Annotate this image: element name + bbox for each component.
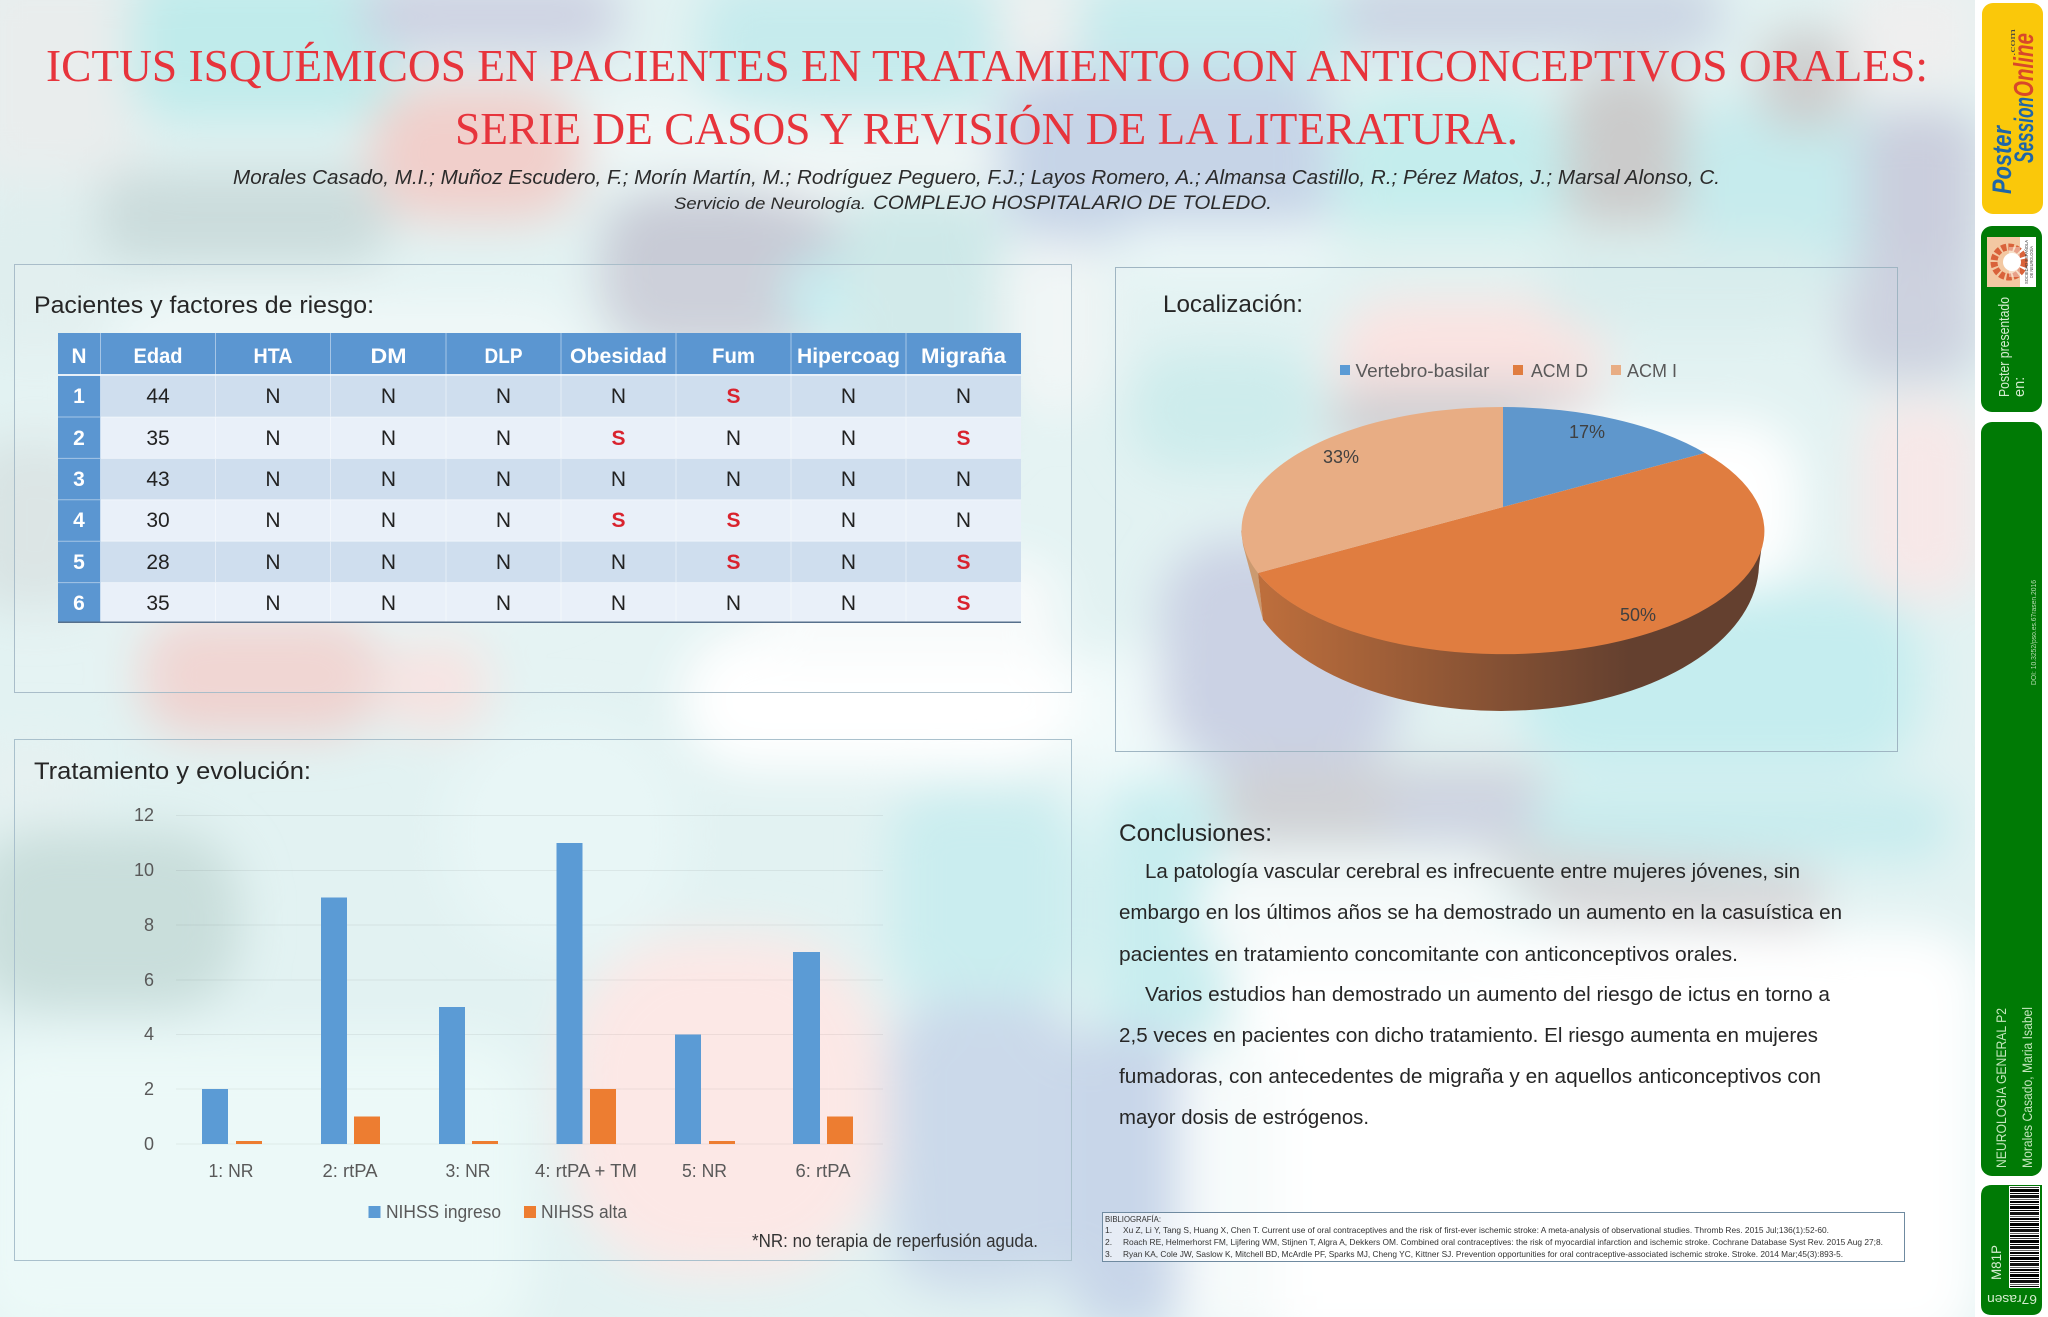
authors and affiliation: COMPLEJO HOSPITALARIO DE TOLEDO. xyxy=(873,192,1272,214)
sidebar: session block xyxy=(1981,422,2042,1176)
table row 6 xyxy=(73,592,971,615)
pie legend: ACM D xyxy=(1531,361,1588,381)
sidebar: poster session online logo xyxy=(1982,3,2043,214)
poster presentado label: en: xyxy=(2012,377,2028,397)
table row 2: N xyxy=(381,427,396,450)
icon: neurology society logo: SOCIEDAD ESPAÑOLA xyxy=(2023,240,2029,284)
table row 3 xyxy=(73,468,971,491)
bibliografia: Xu Z, Li Y, Tang S, Huang X, Chen T. Current use of oral contraceptives and the risk of first-ever ischemic stroke: A meta-analysis of observational studies. Thromb Res. 2015 Jul;136(1):52-60. xyxy=(1123,1225,1829,1235)
title xyxy=(46,40,1928,154)
table row 4 xyxy=(73,509,971,532)
table row 3: N xyxy=(726,468,741,491)
body text xyxy=(1119,860,1842,1129)
table row 3: N xyxy=(956,468,971,491)
series: NIHSS ingreso xyxy=(202,843,820,1144)
chart legend: NIHSS ingreso xyxy=(386,1202,501,1222)
table row 4: N xyxy=(265,509,281,532)
table row 1: N xyxy=(496,385,511,408)
table row 5: S xyxy=(956,551,971,574)
bibliografia xyxy=(1102,1212,1904,1262)
chart legend xyxy=(368,1202,628,1222)
icon: neurology society logo: DE NEUROLOGÍA xyxy=(2028,246,2034,278)
table row 6: 6 xyxy=(73,592,85,615)
table row 4: N xyxy=(496,509,511,532)
heading: conclusiones: Conclusiones: xyxy=(1119,820,1272,847)
session name: NEUROLOGIA GENERAL P2 xyxy=(1993,1008,2009,1168)
table row 4: S xyxy=(611,509,626,532)
table row 1: 1 xyxy=(73,385,85,408)
y axis labels: 4 xyxy=(144,1024,154,1044)
body text: 2,5 veces en pacientes con dicho tratamiento. El riesgo aumenta en mujeres xyxy=(1119,1024,1818,1047)
table row 2: S xyxy=(611,427,626,450)
bibliografia: Roach RE, Helmerhorst FM, Lijfering WM, Stijnen T, Algra A, Dekkers OM. Combined oral contraceptives: the risk of myocardial infarction and ischemic stroke. Cochrane Database Syst Rev. 2015 Aug 27;8. xyxy=(1123,1237,1883,1247)
y axis labels: 10 xyxy=(134,860,154,880)
panel: localizacion xyxy=(1116,268,1898,752)
bibliografia: Ryan KA, Cole JW, Saslow K, Mitchell BD, McArdle PF, Sparks MJ, Cheng YC, Kittner SJ. Prevention opportunities for oral contraceptive-associated ischemic stroke. Stroke. 2014 Mar;45(3):893-5. xyxy=(1123,1249,1843,1259)
pie labels xyxy=(1323,422,1656,625)
table row 1: N xyxy=(841,385,856,408)
sidebar: poster session online logo: .com xyxy=(2008,28,2017,56)
x axis labels: 2: rtPA xyxy=(322,1161,378,1181)
icon: neurology society logo xyxy=(1987,237,2036,287)
x axis labels: 4: rtPA + TM xyxy=(535,1161,637,1181)
table row 3: 43 xyxy=(146,468,170,491)
table row 2: 35 xyxy=(146,427,170,450)
bibliografia: 1. xyxy=(1105,1225,1112,1235)
authors and affiliation xyxy=(233,166,1720,214)
sidebar white strip xyxy=(1975,0,2048,1317)
table header: DM xyxy=(370,345,406,368)
table header: HTA xyxy=(254,345,292,368)
table row 1: N xyxy=(265,385,281,408)
series: NIHSS alta xyxy=(236,1089,853,1144)
table header: Obesidad xyxy=(570,345,667,368)
authors and affiliation: Servicio de Neurología. xyxy=(674,194,866,213)
y axis labels: 6 xyxy=(144,970,154,990)
body text: mayor dosis de estrógenos. xyxy=(1119,1106,1369,1129)
table row 1: N xyxy=(381,385,396,408)
table row 6: S xyxy=(956,592,971,615)
sidebar: poster session online logo: Session xyxy=(2009,97,2039,163)
panel: pacientes y factores de riesgo xyxy=(14,264,1072,692)
author name: Morales Casado, Maria Isabel xyxy=(2019,1007,2035,1168)
congress code: 67rasen xyxy=(1987,1292,2037,1307)
table row 1: N xyxy=(611,385,626,408)
y axis labels: 12 xyxy=(134,805,154,825)
table row 2: N xyxy=(496,427,511,450)
chart legend: NIHSS alta xyxy=(541,1202,628,1222)
title: ICTUS ISQUÉMICOS EN PACIENTES EN TRATAMIENTO CON ANTICONCEPTIVOS ORALES: xyxy=(46,40,1928,91)
table row 5: N xyxy=(611,551,626,574)
conclusiones xyxy=(1119,820,1842,1129)
sidebar: congress block xyxy=(1981,226,2042,412)
y axis labels: 2 xyxy=(144,1079,154,1099)
3D pie chart xyxy=(1241,407,1764,711)
body text: fumadoras, con antecedentes de migraña y en aquellos anticonceptivos con xyxy=(1119,1065,1821,1088)
x axis labels: 3: NR xyxy=(446,1161,490,1181)
table header xyxy=(72,345,1006,368)
bibliografia: 2. xyxy=(1105,1237,1112,1247)
panel: tratamiento y evolucion xyxy=(14,740,1072,1260)
table row 6: N xyxy=(726,592,741,615)
pie labels: 50% xyxy=(1620,605,1656,625)
body text: La patología vascular cerebral es infrecuente entre mujeres jóvenes, sin xyxy=(1145,860,1800,883)
barcode xyxy=(2009,1186,2040,1288)
table row 5 xyxy=(73,551,971,574)
y axis labels: 0 xyxy=(144,1134,154,1154)
table row 6: N xyxy=(381,592,396,615)
bibliografia: BIBLIOGRAFÍA: xyxy=(1105,1214,1161,1224)
table row 4: N xyxy=(956,509,971,532)
footnote: *NR: no terapia de reperfusión aguda. xyxy=(752,1231,1038,1251)
table row 5: N xyxy=(381,551,396,574)
table row 2 xyxy=(73,427,971,450)
table header: N xyxy=(72,345,86,368)
table row 5: N xyxy=(841,551,856,574)
pie labels: 33% xyxy=(1323,447,1359,467)
table row 3: N xyxy=(611,468,626,491)
body text: pacientes en tratamiento concomitante con anticonceptivos orales. xyxy=(1119,943,1738,966)
table row 2: 2 xyxy=(73,427,85,450)
poster code: M81P xyxy=(1988,1245,2004,1280)
table header: Fum xyxy=(712,345,755,368)
table row 4: 4 xyxy=(73,509,85,532)
table row 5: 5 xyxy=(73,551,85,574)
table row 4: N xyxy=(841,509,856,532)
table row 4: 30 xyxy=(146,509,170,532)
table row 3: N xyxy=(496,468,511,491)
table row 5: N xyxy=(265,551,281,574)
table xyxy=(58,333,1021,623)
table row 5: N xyxy=(496,551,511,574)
x axis labels: 5: NR xyxy=(682,1161,727,1181)
table row 5: 28 xyxy=(146,551,170,574)
bibliografia: 3. xyxy=(1105,1249,1112,1259)
table header: Edad xyxy=(134,345,182,368)
table row 3: N xyxy=(381,468,396,491)
table row 1 xyxy=(73,385,971,408)
title: SERIE DE CASOS Y REVISIÓN DE LA LITERATURA. xyxy=(455,103,1518,154)
table row 3: 3 xyxy=(73,468,85,491)
table header: DLP xyxy=(484,345,522,368)
sidebar: poster session online logo: Online xyxy=(2008,33,2039,97)
heading: tratamiento: Tratamiento y evolución: xyxy=(34,758,311,785)
table row 1: N xyxy=(956,385,971,408)
table row 6: N xyxy=(841,592,856,615)
table row 6: N xyxy=(496,592,511,615)
bar chart xyxy=(134,805,883,1222)
body text: Varios estudios han demostrado un aumento del riesgo de ictus en torno a xyxy=(1145,983,1831,1006)
table header: Migraña xyxy=(921,345,1006,368)
table row 5: S xyxy=(726,551,741,574)
table row 6: N xyxy=(265,592,281,615)
table header: Hipercoag xyxy=(797,345,900,368)
authors and affiliation: Morales Casado, M.I.; Muñoz Escudero, F.; Morín Martín, M.; Rodríguez Peguero, F.J.; Layos Romero, A.; Almansa Castillo, R.; Pérez Matos, J.; Marsal Alonso, C. xyxy=(233,166,1720,189)
sidebar: poster session online logo: Poster xyxy=(1987,125,2017,194)
table row 4: N xyxy=(381,509,396,532)
table row 6: 35 xyxy=(146,592,170,615)
heading: localizacion: Localización: xyxy=(1163,291,1303,318)
x axis labels: 1: NR xyxy=(208,1161,254,1181)
doi: DOI: 10.3252/pso.es.67rasen.2016 xyxy=(2029,580,2038,685)
x axis labels xyxy=(208,1161,850,1181)
table row 4: S xyxy=(726,509,741,532)
pie legend: Vertebro-basilar xyxy=(1356,361,1490,381)
table row 6: N xyxy=(611,592,626,615)
table row 1: S xyxy=(726,385,741,408)
table row 2: N xyxy=(841,427,856,450)
pie labels: 17% xyxy=(1569,422,1605,442)
sidebar: code and barcode xyxy=(1981,1185,2042,1315)
table row 3: N xyxy=(841,468,856,491)
poster presentado label: Poster presentado xyxy=(1997,297,2013,397)
table row 2: S xyxy=(956,427,971,450)
pie legend xyxy=(1340,361,1677,381)
poster presentado label xyxy=(1997,297,2028,397)
y axis labels: 8 xyxy=(144,915,154,935)
table row 1: 44 xyxy=(146,385,170,408)
table row 3: N xyxy=(265,468,281,491)
heading: pacientes: Pacientes y factores de riesgo: xyxy=(34,292,374,319)
table row 2: N xyxy=(265,427,281,450)
body text: embargo en los últimos años se ha demostrado un aumento en la casuística en xyxy=(1119,901,1842,924)
x axis labels: 6: rtPA xyxy=(796,1161,850,1181)
table row 2: N xyxy=(726,427,741,450)
pie legend: ACM I xyxy=(1627,361,1677,381)
y axis labels xyxy=(134,805,154,1154)
